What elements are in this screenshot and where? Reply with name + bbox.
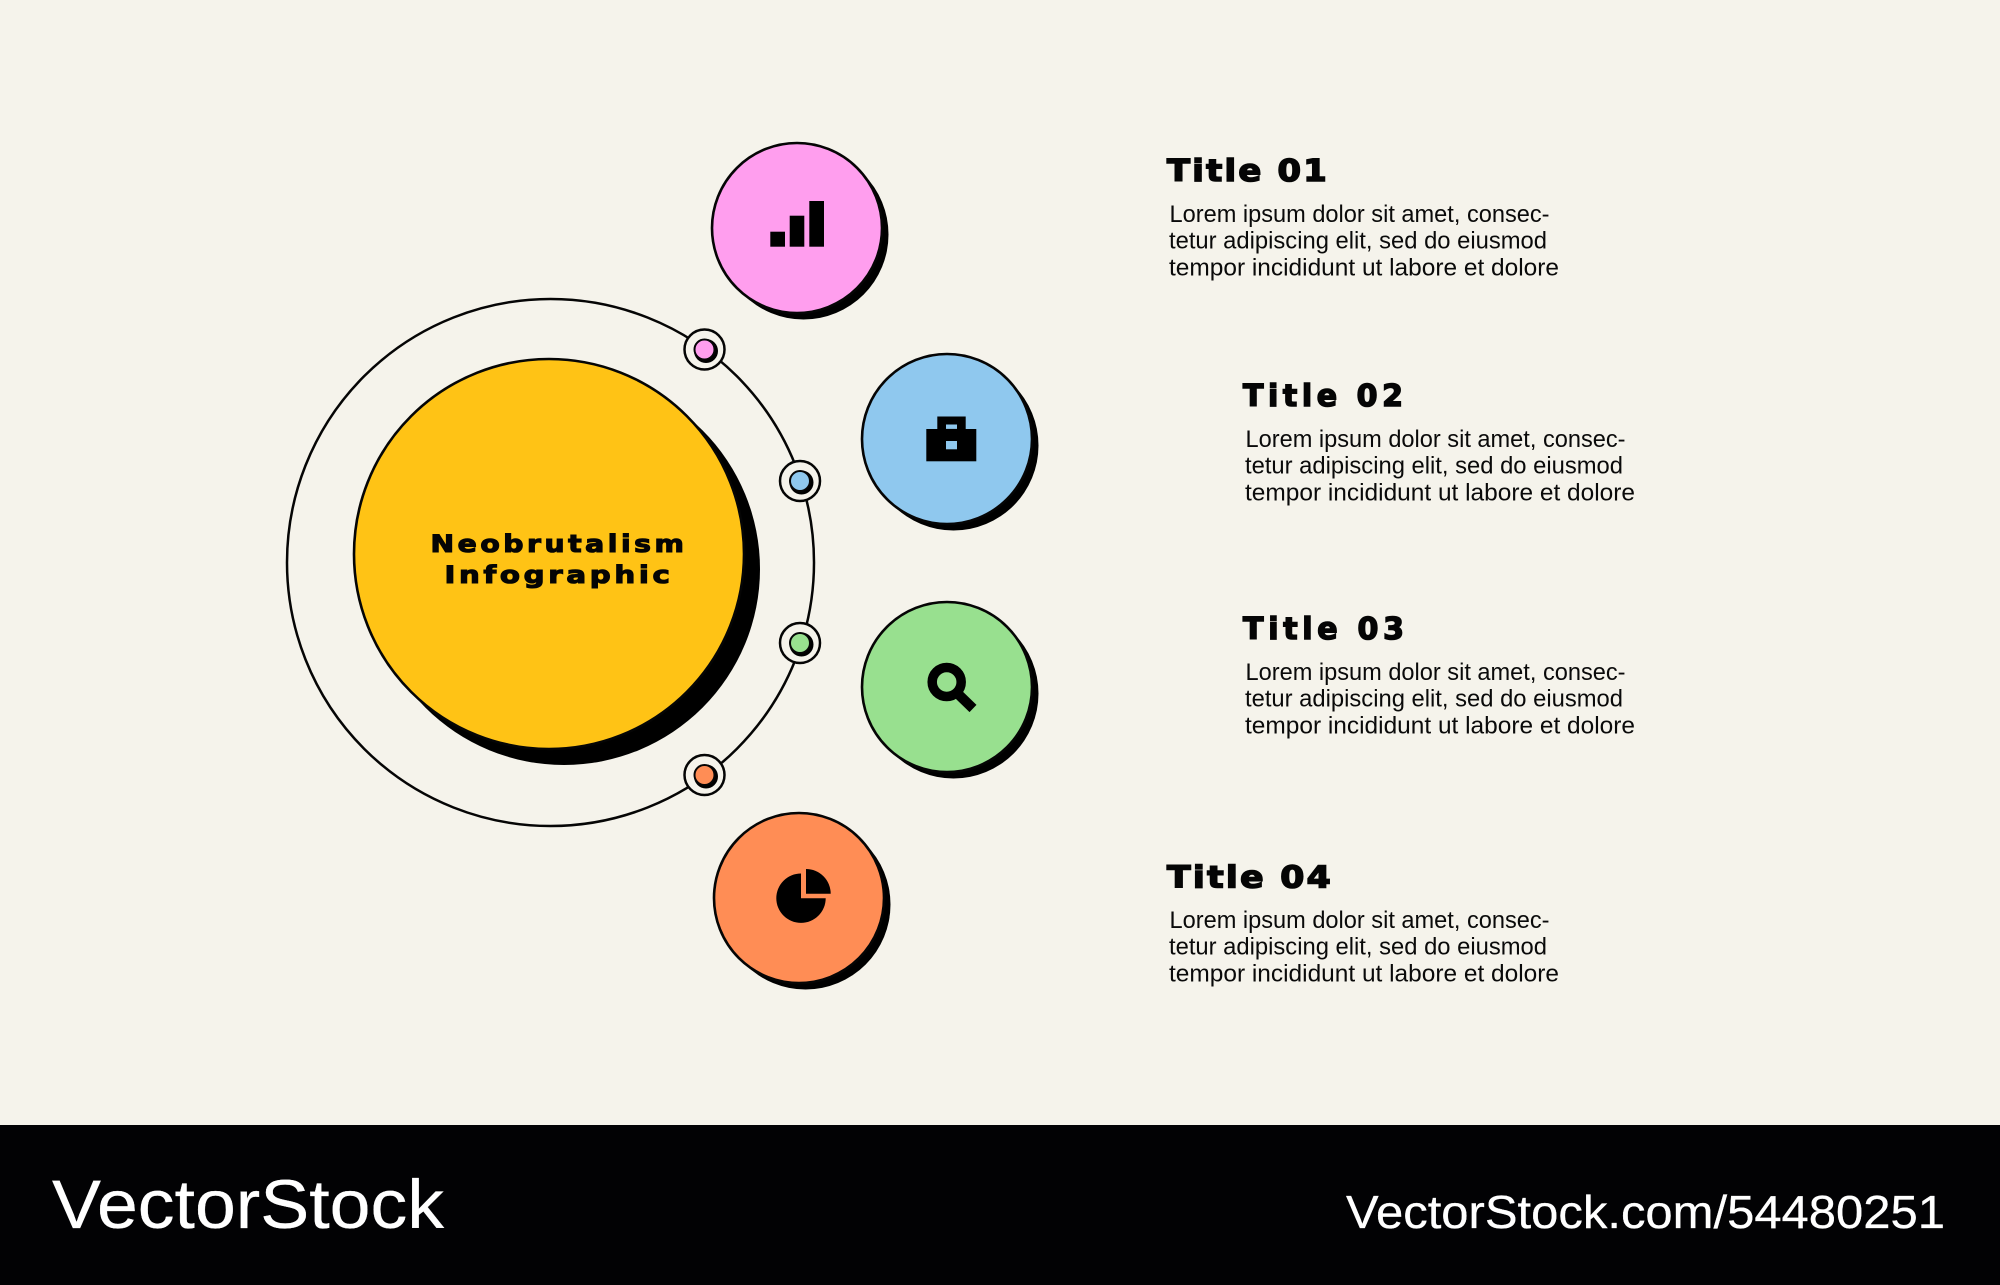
icon: magnifier bbox=[932, 668, 973, 708]
text block: Title 04: tempor incididunt ut labore et dolore bbox=[1169, 960, 1559, 988]
orbit node: blue bbox=[780, 461, 820, 501]
text block: Title 01: Title 01 bbox=[1167, 154, 1329, 189]
panel: orange circle with pie chart icon bbox=[714, 813, 890, 990]
text block: Title 02: tetur adipiscing elit, sed do eiusmod bbox=[1245, 453, 1623, 480]
text block: Title 02: Title 02 bbox=[1243, 379, 1405, 414]
text block: Title 04: tetur adipiscing elit, sed do eiusmod bbox=[1169, 934, 1547, 961]
text block: Title 02: tempor incididunt ut labore et dolore bbox=[1245, 480, 1635, 506]
text block: Title 03: Title 03 bbox=[1243, 612, 1406, 647]
icon: pie chart bbox=[776, 869, 831, 923]
icon: briefcase bbox=[926, 416, 976, 461]
central title text bbox=[430, 530, 688, 589]
text block: Title 04: Title 04 bbox=[1167, 860, 1333, 896]
panel: pink circle with bar chart icon bbox=[712, 143, 888, 320]
footer bar bbox=[0, 1125, 2000, 1285]
orbit node: pink bbox=[684, 330, 724, 370]
orbit node: orange bbox=[684, 755, 724, 795]
text block: Title 01: tetur adipiscing elit, sed do eiusmod bbox=[1169, 228, 1547, 255]
central title text: Infographic bbox=[444, 561, 674, 589]
text block: Title 03 bbox=[1243, 612, 1635, 740]
central title text: Neobrutalism bbox=[430, 530, 688, 558]
panel: blue circle with briefcase icon bbox=[862, 354, 1038, 530]
orbit node: green bbox=[780, 623, 820, 663]
text block: Title 04: Lorem ipsum dolor sit amet, consec- bbox=[1170, 907, 1550, 934]
text block: Title 03: tetur adipiscing elit, sed do eiusmod bbox=[1245, 686, 1623, 713]
panel: green circle with magnifier icon bbox=[862, 602, 1038, 778]
outer orbit ring bbox=[287, 299, 814, 826]
text block: Title 01: Lorem ipsum dolor sit amet, consec- bbox=[1170, 201, 1550, 228]
text block: Title 02: Lorem ipsum dolor sit amet, consec- bbox=[1246, 426, 1626, 453]
text block: Title 04 bbox=[1167, 860, 1559, 988]
footer logo text: VectorStock bbox=[52, 1166, 445, 1243]
text block: Title 02 bbox=[1243, 379, 1635, 506]
central circle with title bbox=[354, 359, 760, 765]
text block: Title 03: Lorem ipsum dolor sit amet, consec- bbox=[1246, 659, 1626, 686]
text block: Title 03: tempor incididunt ut labore et dolore bbox=[1245, 712, 1635, 740]
text block: Title 01 bbox=[1167, 154, 1559, 282]
text block: Title 01: tempor incididunt ut labore et dolore bbox=[1169, 254, 1559, 282]
icon: bar chart bbox=[770, 201, 824, 247]
footer image URL: VectorStock.com/54480251 bbox=[1346, 1186, 1945, 1238]
